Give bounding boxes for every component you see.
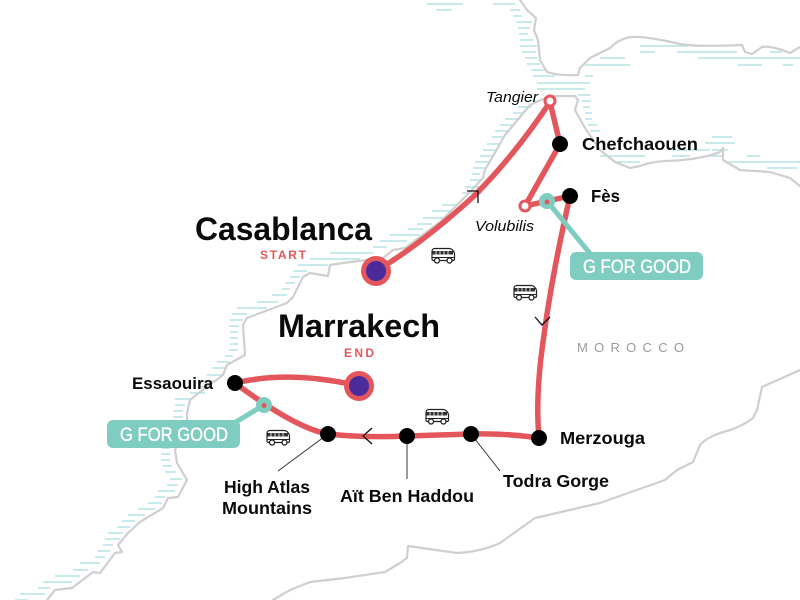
label: Morocco: MOROCCO bbox=[577, 340, 684, 355]
label: Casablanca: Casablanca bbox=[195, 211, 372, 247]
callout: G for Good (Essaouira): G FOR GOOD bbox=[120, 425, 228, 446]
label: Tangier: Tangier bbox=[486, 90, 539, 106]
route line bbox=[235, 102, 570, 438]
callout: G for Good (Essaouira) bbox=[107, 397, 272, 448]
label: Essaouira: Essaouira bbox=[132, 374, 214, 393]
stop: Casablanca marker bbox=[361, 256, 391, 286]
icon: bus bbox=[514, 286, 536, 300]
label: Chefchaouen: Chefchaouen bbox=[582, 134, 698, 154]
label: Todra Gorge: Todra Gorge bbox=[503, 471, 609, 491]
icon: bus bbox=[426, 410, 448, 424]
callout: G for Good (Fes): G FOR GOOD bbox=[583, 257, 691, 278]
label: Aït Ben Haddou: Aït Ben Haddou bbox=[340, 486, 474, 506]
stop: black city dots bbox=[227, 136, 578, 446]
label: Fès: Fès bbox=[591, 186, 620, 206]
label: High Atlas Mountains: High Atlas bbox=[224, 477, 310, 497]
stop: Volubilis marker bbox=[520, 201, 530, 211]
label: END: END bbox=[344, 346, 374, 360]
icon: bus bbox=[267, 430, 290, 445]
leader lines bbox=[278, 434, 500, 479]
label: High Atlas Mountains bbox=[222, 477, 312, 518]
stop: Marrakech marker bbox=[344, 371, 374, 401]
callout: G for Good (Fes) bbox=[539, 193, 703, 280]
stop: Tangier marker bbox=[545, 96, 555, 106]
direction arrows bbox=[363, 191, 550, 444]
icon: bus bbox=[432, 248, 454, 263]
label: Volubilis: Volubilis bbox=[475, 219, 534, 235]
label: Merzouga: Merzouga bbox=[560, 428, 645, 448]
label: High Atlas Mountains: Mountains bbox=[222, 498, 312, 518]
label: START: START bbox=[260, 248, 307, 262]
label: Marrakech: Marrakech bbox=[278, 308, 440, 344]
